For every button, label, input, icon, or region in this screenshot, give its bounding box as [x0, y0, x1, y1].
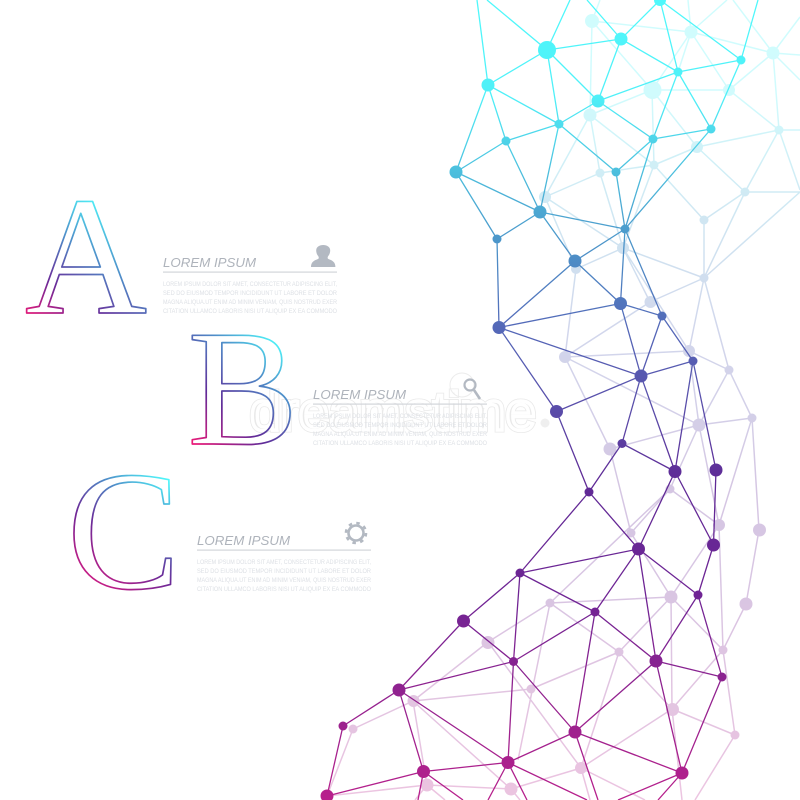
panel: A text [163, 245, 337, 315]
letter B: B [188, 296, 298, 480]
body text B: SED DO EIUSMOD TEMPOR INCIDIDUNT UT LABORE ET DOLOR [313, 422, 487, 429]
icon: gear [346, 523, 366, 543]
body text A: LOREM IPSUM DOLOR SIT AMET, CONSECTETUR ADIPISCING ELIT, [163, 281, 337, 288]
watermark: dreamstime [250, 382, 536, 442]
background network [327, 0, 800, 800]
body text C: CITATION ULLAMCO LABORIS NISI UT ALIQUIP EX EA COMMODO [197, 586, 371, 593]
body text B: MAGNA ALIQUA.UT ENIM AD MINIM VENIAM, QUIS NOSTRUD EXER [313, 431, 487, 438]
body text B: CITATION ULLAMCO LABORIS NISI UT ALIQUIP EX EA COMMODO [313, 440, 487, 447]
body text A [163, 281, 337, 315]
panel: B text [313, 380, 487, 447]
body text A: CITATION ULLAMCO LABORIS NISI UT ALIQUIP EX EA COMMODO [163, 308, 337, 315]
body text C: LOREM IPSUM DOLOR SIT AMET, CONSECTETUR ADIPISCING ELIT, [197, 559, 371, 566]
network links [327, 0, 758, 800]
foreground network [320, 0, 758, 800]
letter A: A [25, 162, 147, 350]
faint network nodes [348, 14, 784, 796]
body text A: SED DO EIUSMOD TEMPOR INCIDIDUNT UT LABORE ET DOLOR [163, 290, 337, 297]
letter C: C [67, 437, 180, 625]
faint network links [327, 0, 800, 800]
watermark: dreamstime [250, 382, 536, 442]
body text B [313, 413, 487, 447]
body text C: SED DO EIUSMOD TEMPOR INCIDIDUNT UT LABORE ET DOLOR [197, 568, 371, 575]
body text C: MAGNA ALIQUA.UT ENIM AD MINIM VENIAM, QUIS NOSTRUD EXER [197, 577, 371, 584]
heading B: LOREM IPSUM [313, 387, 407, 402]
network nodes [320, 0, 746, 800]
body text C [197, 559, 371, 593]
body text A: MAGNA ALIQUA.UT ENIM AD MINIM VENIAM, QUIS NOSTRUD EXER [163, 299, 337, 306]
body text B: LOREM IPSUM DOLOR SIT AMET, CONSECTETUR ADIPISCING ELIT, [313, 413, 487, 420]
icon: person [311, 245, 335, 267]
panel: C text [197, 523, 371, 593]
icon: magnifier [464, 380, 480, 399]
heading C: LOREM IPSUM [197, 533, 291, 548]
heading A: LOREM IPSUM [163, 255, 257, 270]
